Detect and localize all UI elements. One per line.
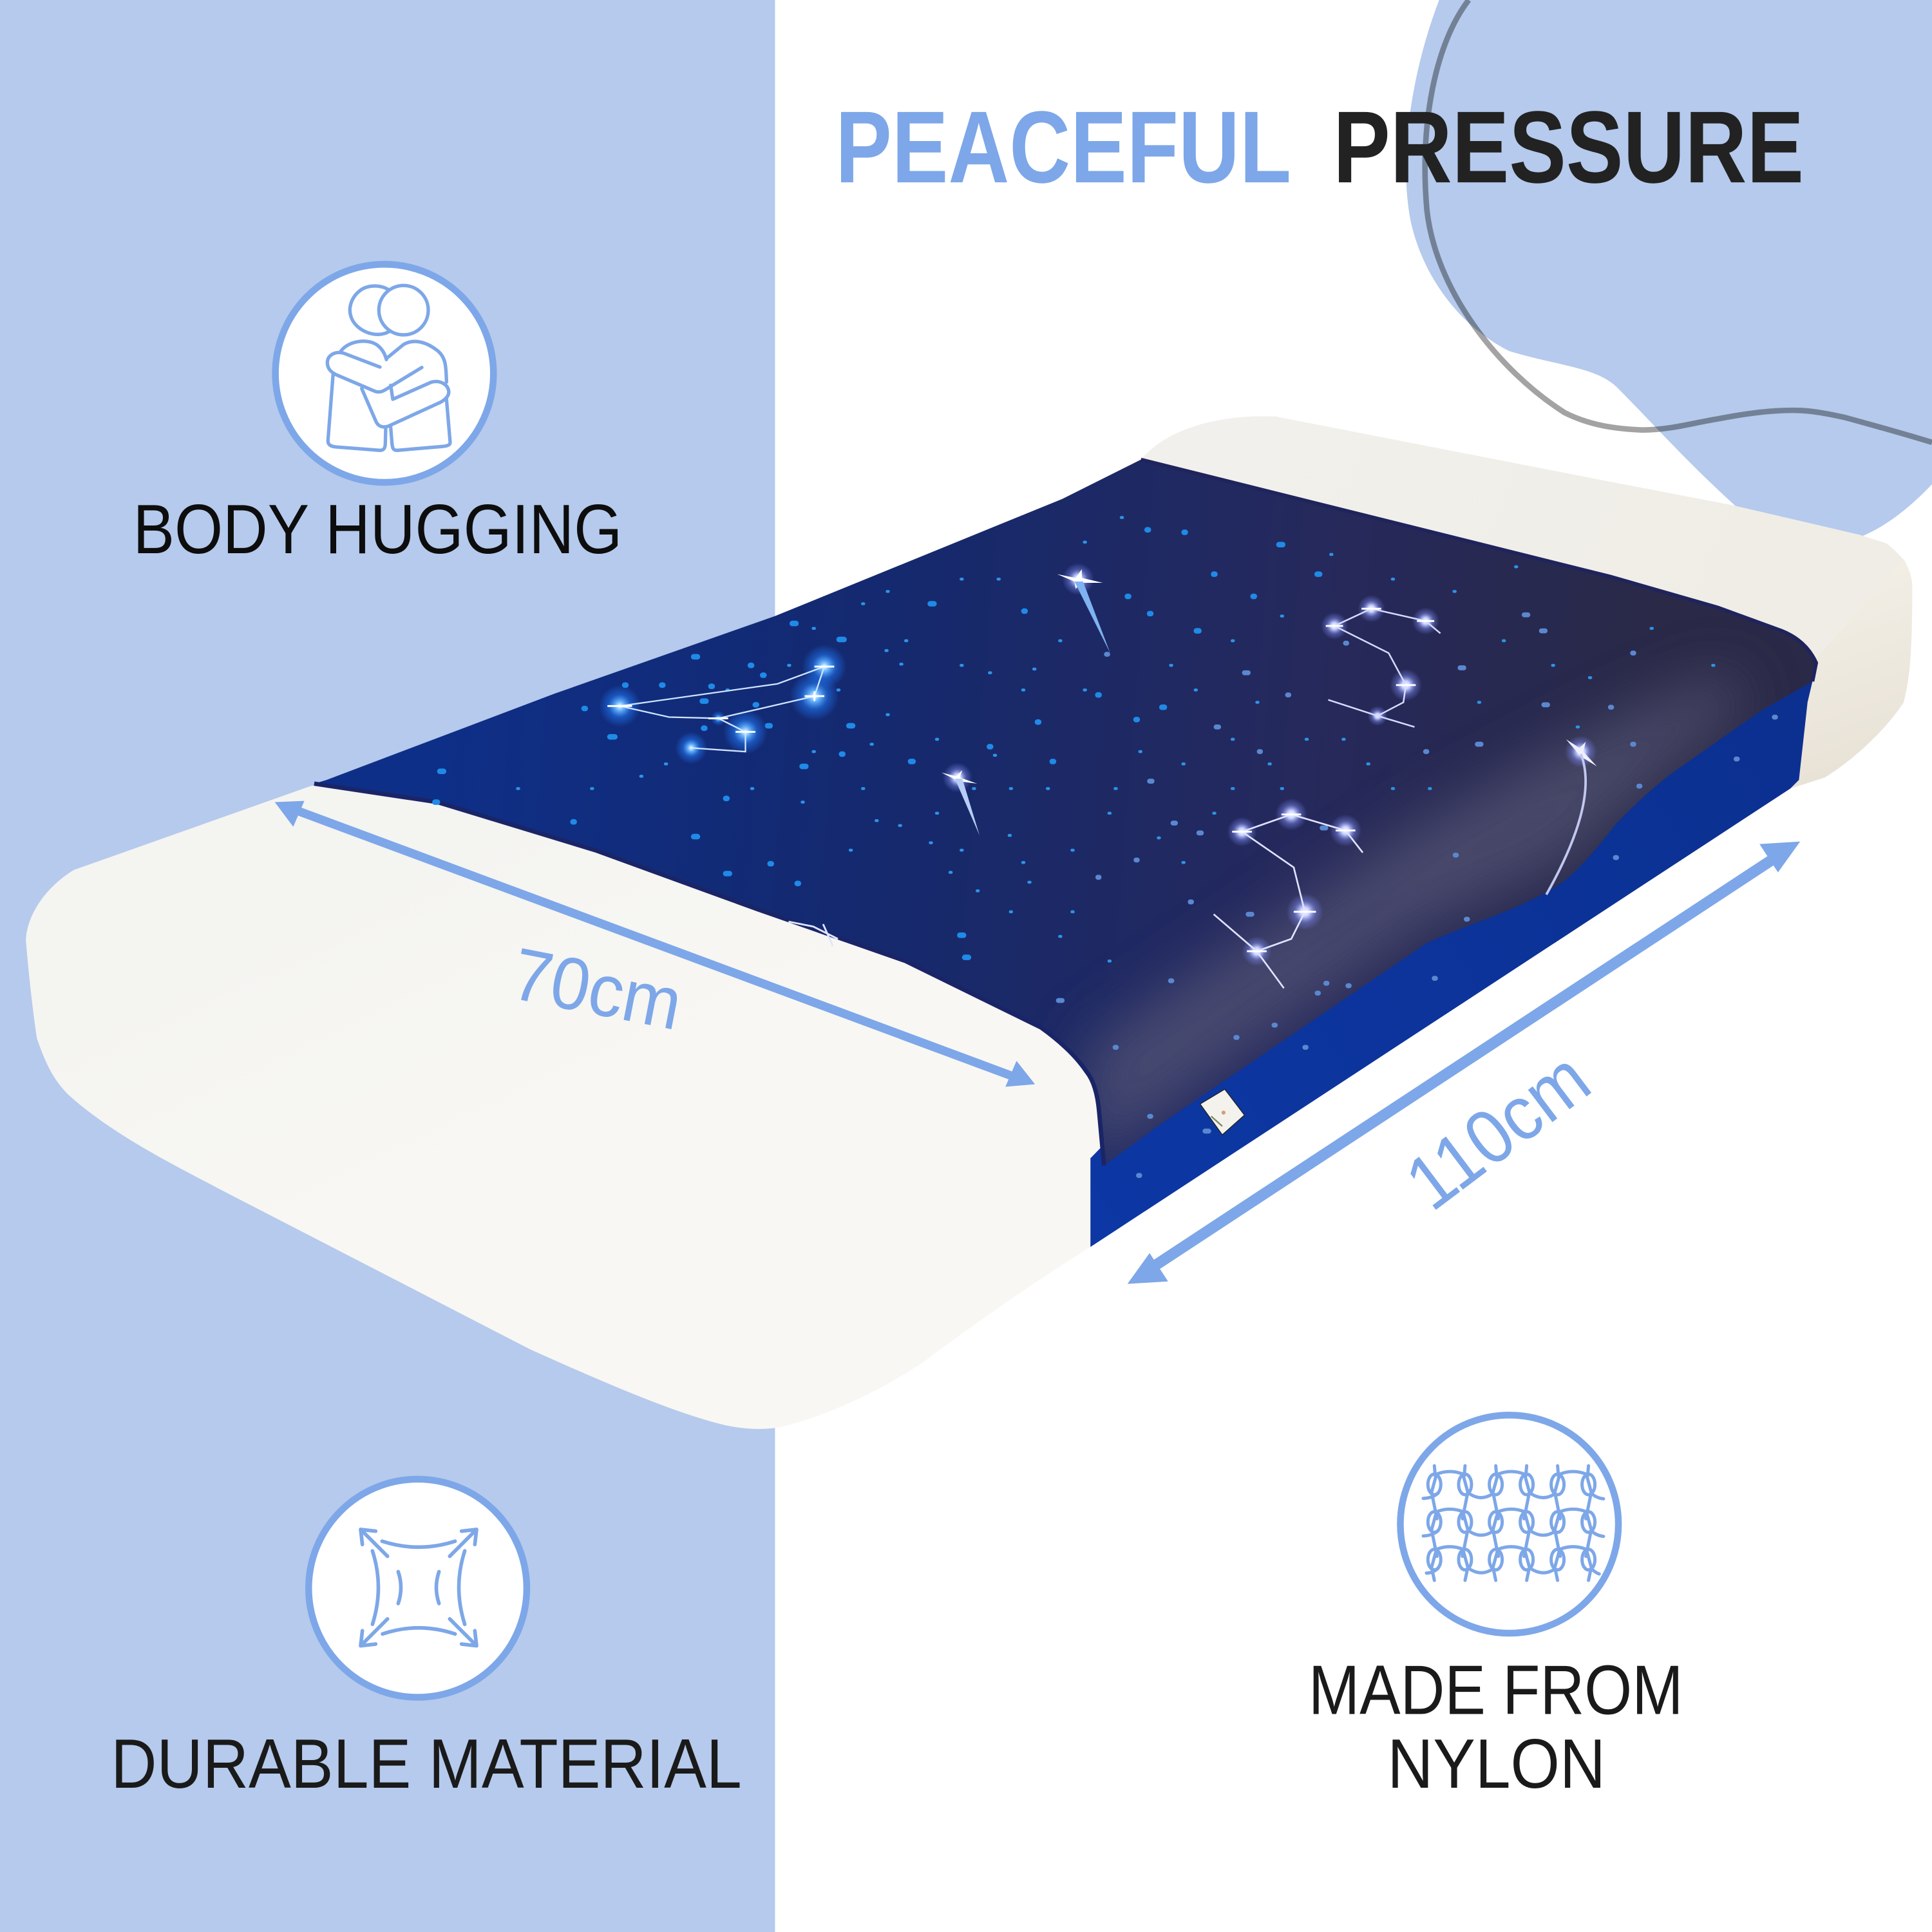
sheet fold sheen [1084,672,1750,1171]
constellation top right [1321,595,1441,727]
constellation lower right [1214,799,1363,988]
mattress far end top face [1141,416,1904,658]
sheet zipper edge [314,784,1104,1166]
title [835,90,1804,204]
mattress far end side face [1790,560,1912,788]
label: body hugging: BODY HUGGING [133,490,622,569]
label: made from nylon: MADE FROM [1309,1651,1683,1729]
dimension label: 70cm: 70cm [506,933,688,1046]
label: durable material: DURABLE MATERIAL [111,1725,742,1803]
sewn-in label tag [1200,1089,1244,1135]
icon: hugging figures [276,264,493,482]
shooting star one [942,762,980,835]
constellation lower left [599,645,846,764]
feature: durable material [111,1479,742,1803]
label: made from nylon [1309,1651,1683,1803]
shooting star two [1057,563,1110,653]
dimension arrow: 70cm [275,801,1035,1087]
dimension label: 110cm: 110cm [1390,1036,1605,1226]
title word: PRESSURE: PRESSURE [1333,90,1804,204]
dimension arrow: 110cm [1128,842,1800,1284]
title word: PEACEFUL: PEACEFUL [835,90,1291,204]
shooting star three [1546,735,1597,895]
tiny stars [518,518,1714,961]
bright stars [435,530,1320,958]
sheet side panel [1090,665,1812,1247]
product: weighted sensory bed sheet on mattress [26,416,1912,1429]
icon: stretch arrows [308,1479,527,1698]
star print peeking at zipper [788,922,838,946]
sheet top face [314,460,1816,1166]
feature: made from nylon [1309,1415,1683,1803]
label: made from nylon: NYLON [1387,1725,1605,1803]
decorative blue blob top right [1406,0,1932,537]
icon: knit mesh [1400,1415,1618,1633]
pale right-side stars [1058,615,1776,1175]
panel: left blue background [0,0,775,1932]
mattress body [26,416,1912,1429]
feature: body hugging [133,264,622,569]
sheet far hem [1141,460,1816,681]
decorative grey curve [1425,0,1932,442]
